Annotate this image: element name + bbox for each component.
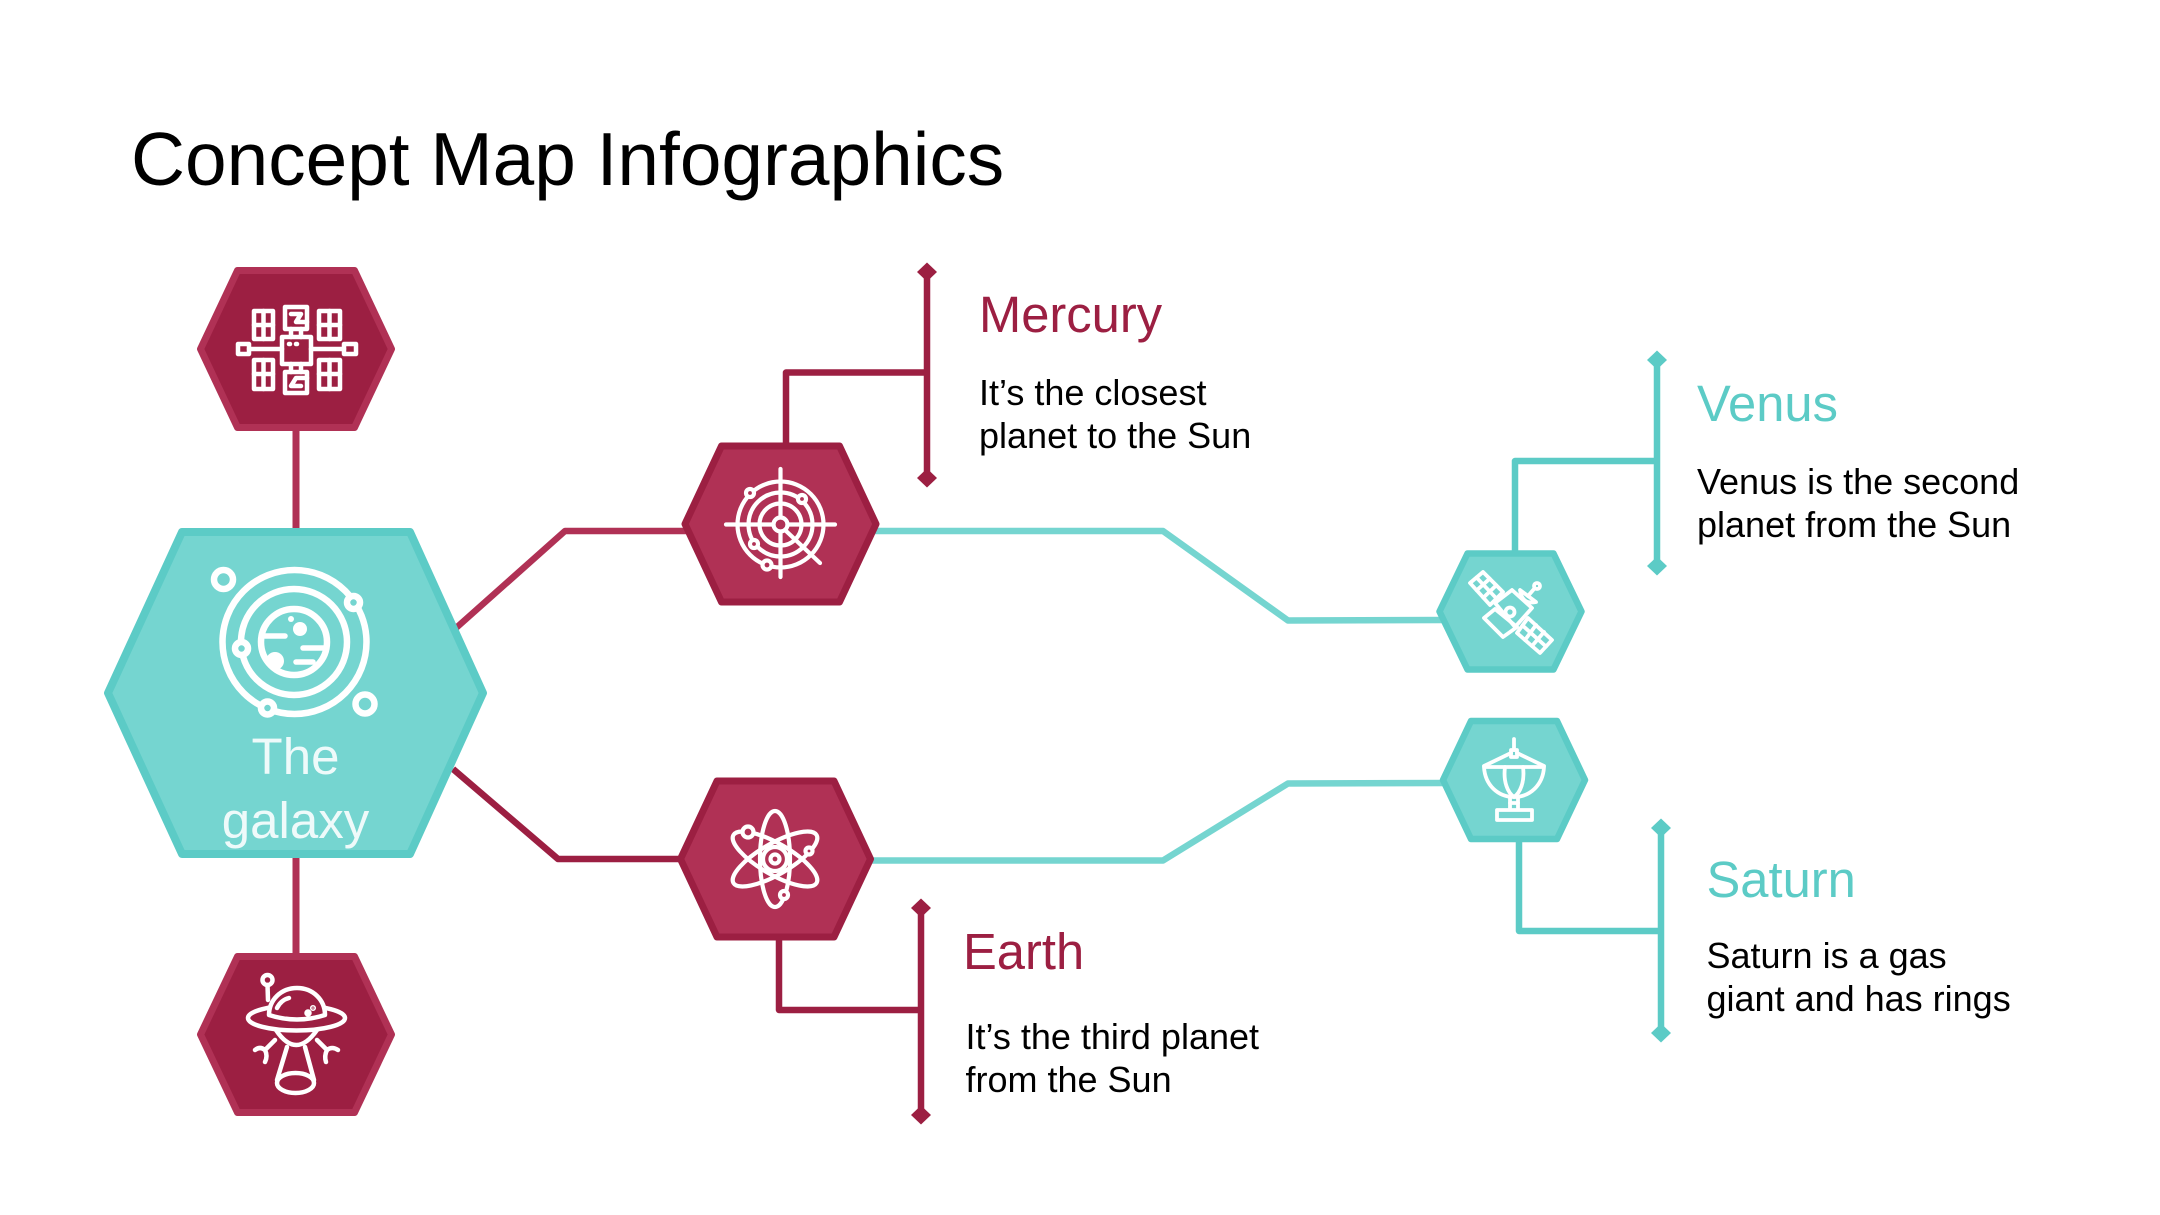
text block: Saturn: giant and has rings: [1706, 978, 2011, 1019]
hexagon: Saturn with dish icon: [1443, 721, 1585, 839]
hexagon: central node The galaxy: [108, 532, 483, 854]
hexagon: top with space station icon: [200, 270, 392, 428]
icon: dish trophy: [1484, 739, 1544, 820]
hexagon: Mercury with radar icon: [685, 446, 876, 602]
text block: Mercury: Mercury: [979, 286, 1163, 343]
text block: Venus: planet from the Sun: [1697, 504, 2011, 545]
connector: galaxy to top hexagon: [292, 425, 300, 535]
icon: satellite: [1470, 572, 1552, 653]
text block: Earth: [963, 923, 1259, 1100]
text block: Earth: It’s the third planet: [966, 1016, 1259, 1057]
bracket: Earth: [779, 898, 931, 1124]
hexagon: bottom with UFO icon: [200, 956, 392, 1112]
text block: Saturn: Saturn: [1706, 851, 1856, 908]
bracket: Venus: [1515, 350, 1667, 576]
text block: Saturn: Saturn is a gas: [1706, 935, 1947, 976]
icon: atom: [726, 811, 824, 907]
bracket: Saturn: [1519, 818, 1671, 1042]
text block: Earth: from the Sun: [966, 1059, 1172, 1100]
hexagon: Venus with satellite icon: [1440, 554, 1582, 670]
connector: galaxy to Earth: [453, 769, 685, 859]
connector: Mercury to Venus: [875, 531, 1445, 620]
text block: Venus: Venus is the second: [1697, 461, 2019, 502]
connector: galaxy to bottom hexagon: [292, 852, 300, 960]
text block: Mercury: [979, 286, 1251, 456]
icon: radar: [726, 469, 835, 577]
text block: Saturn: [1706, 851, 2011, 1019]
text block: Mercury: planet to the Sun: [979, 415, 1251, 456]
connector: Earth to Saturn: [870, 783, 1448, 860]
connector: galaxy to Mercury: [456, 531, 690, 628]
title: Concept Map Infographics: [131, 117, 1004, 201]
text block: Venus: Venus: [1697, 375, 1838, 432]
label: The galaxy: The: [252, 728, 339, 785]
text block: Venus: [1697, 375, 2019, 545]
label: The galaxy: galaxy: [222, 792, 370, 849]
text block: Mercury: It’s the closest: [979, 372, 1206, 413]
text block: Earth: Earth: [963, 923, 1084, 980]
icon: solar system: [214, 570, 374, 714]
icon: UFO: [248, 975, 345, 1093]
icon: space station: [238, 307, 356, 393]
bracket: Mercury: [786, 262, 937, 488]
hexagon: Earth with atom icon: [680, 781, 870, 937]
